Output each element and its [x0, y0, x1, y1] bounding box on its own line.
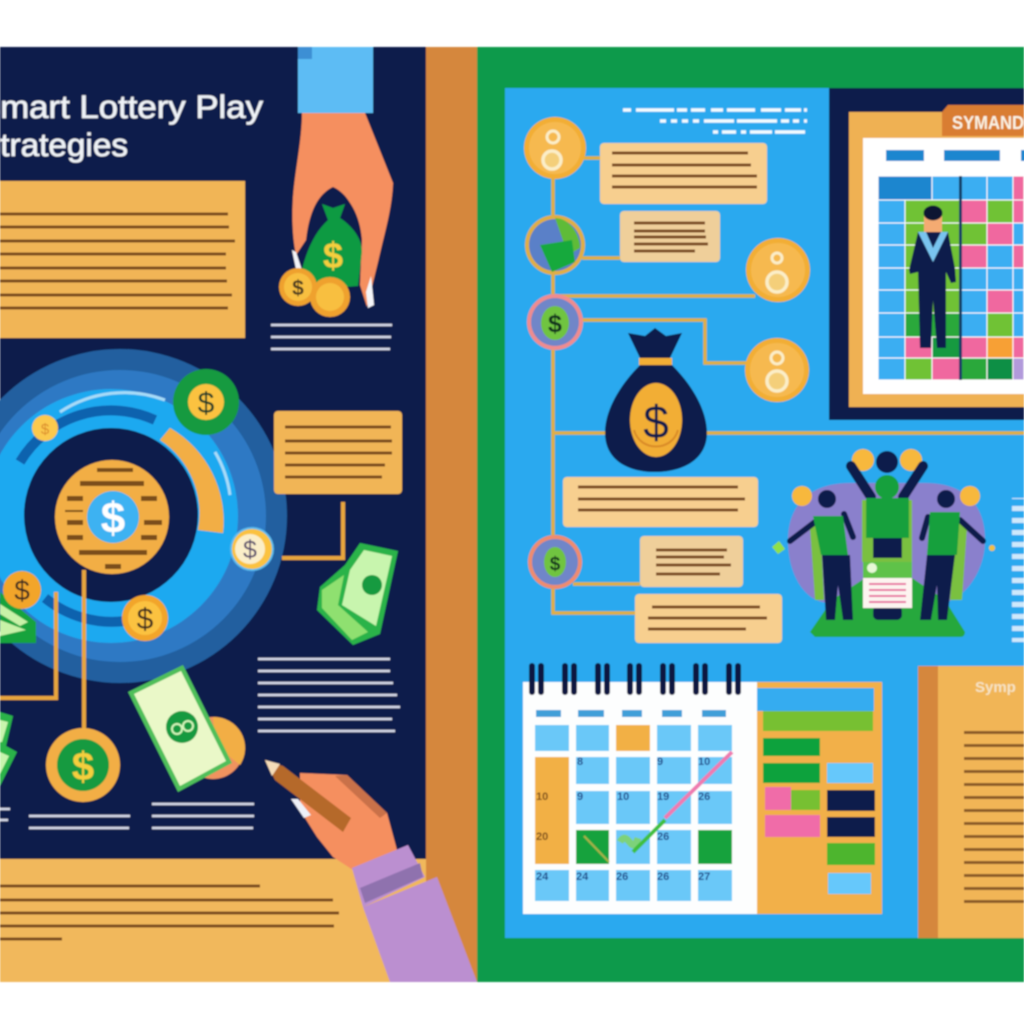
icon: bottom green coin [46, 728, 120, 802]
icon: money bag [605, 328, 707, 472]
calendar numbers: 26 [657, 831, 669, 843]
icon: cream coin [230, 527, 274, 571]
icon: left coin [3, 571, 41, 609]
connector: callout [282, 502, 343, 558]
connector: ring to lower left [0, 592, 56, 698]
left figure [790, 490, 853, 620]
calendar numbers: 9 [577, 791, 583, 803]
icon: timeline coin three: $ [548, 310, 562, 338]
panel: calendar [523, 663, 757, 914]
panel: summary [918, 666, 1024, 938]
text box two [620, 211, 720, 262]
icon: green coin: $ [198, 387, 215, 420]
text block: small caption two [152, 804, 254, 828]
calendar numbers: 10 [698, 756, 710, 768]
center dial [55, 460, 169, 574]
center dial: $ [101, 494, 125, 543]
icon: lower coin [122, 595, 168, 641]
calendar numbers [536, 756, 710, 883]
icon: coin right upper [746, 238, 810, 302]
text block: ring callout [274, 411, 402, 494]
day cells [535, 725, 732, 901]
flow connectors [553, 158, 1024, 613]
panel: summary: Symp [975, 679, 1016, 696]
calendar numbers: 26 [616, 871, 628, 883]
calendar numbers: 10 [617, 791, 629, 803]
text box one [600, 143, 767, 204]
icon: timeline coin four: $ [550, 554, 561, 575]
calendar spiral rings [529, 663, 741, 695]
text block: intro [0, 181, 245, 338]
icon: orange disc behind bill [182, 717, 245, 779]
panel: left navy page [0, 47, 427, 862]
calendar numbers: 26 [698, 791, 710, 803]
connector: dial to bottom [82, 570, 86, 735]
icon: timeline coin one [524, 117, 586, 179]
coins: $ [292, 277, 304, 300]
coins [279, 268, 350, 317]
calendar numbers: 19 [657, 791, 669, 803]
panel: schedule grid frame [829, 88, 1024, 420]
icon: bottom green coin: $ [72, 745, 94, 789]
trend line [584, 752, 732, 862]
text block: right edge small text [1012, 498, 1024, 642]
icon: banknote [128, 665, 232, 792]
text block: small caption one [29, 816, 130, 828]
calendar numbers: 24 [536, 871, 549, 883]
panel: calendar sidebar legend [757, 682, 882, 914]
icon: timeline coin four [528, 535, 582, 589]
illustration: team celebrating [772, 449, 995, 637]
chart: concentric ring diagram [0, 349, 287, 683]
icon: green coin [173, 369, 239, 435]
calendar numbers: 8 [577, 756, 583, 768]
icon: bills far left [0, 712, 17, 786]
panel: right blue inner page [505, 88, 1024, 938]
text box three [563, 477, 758, 527]
grid divider [959, 176, 962, 380]
right figure [920, 490, 983, 620]
panel: right green page [477, 47, 1024, 982]
panel: bottom text band [0, 859, 426, 982]
orange spine strip [426, 47, 477, 982]
text box five [635, 594, 782, 643]
column headers [886, 150, 1024, 161]
text block: small caption far left [0, 809, 10, 820]
calendar numbers: 27 [698, 871, 710, 883]
money bag: $ [323, 235, 343, 276]
illustration: hand with pencil [265, 760, 477, 982]
text box four [640, 536, 743, 587]
calendar numbers: 26 [657, 871, 669, 883]
coins held up [792, 449, 980, 506]
icon: cash bundle [317, 543, 398, 645]
text block: ring caption [258, 659, 400, 731]
icon: small coin [32, 415, 58, 441]
icon: timeline coin three [527, 294, 583, 350]
icon: lower coin: $ [137, 603, 154, 636]
illustration: hand holding money bag [279, 47, 393, 317]
calendar numbers: 20 [536, 831, 548, 843]
grid cells [878, 176, 1024, 380]
icon: cream coin: $ [243, 536, 257, 564]
icon: left coin: $ [14, 575, 30, 606]
icon: small coin: $ [41, 421, 50, 438]
sign board [863, 562, 912, 608]
icon: cash stack left [0, 592, 36, 643]
money bag [300, 204, 362, 288]
day headers [536, 710, 726, 717]
calendar numbers: 10 [536, 791, 548, 803]
text block: hand caption [271, 325, 392, 349]
tab label [942, 105, 1024, 136]
icon: timeline coin two [525, 215, 585, 275]
sleeve [352, 845, 477, 982]
person in suit [909, 206, 956, 348]
calendar numbers: 24 [576, 871, 589, 883]
calendar numbers: 9 [657, 756, 663, 768]
centre figure [851, 451, 923, 620]
icon: money bag: $ [643, 396, 669, 448]
icon: coin right lower [745, 338, 809, 402]
decorative heading lines [623, 110, 807, 132]
